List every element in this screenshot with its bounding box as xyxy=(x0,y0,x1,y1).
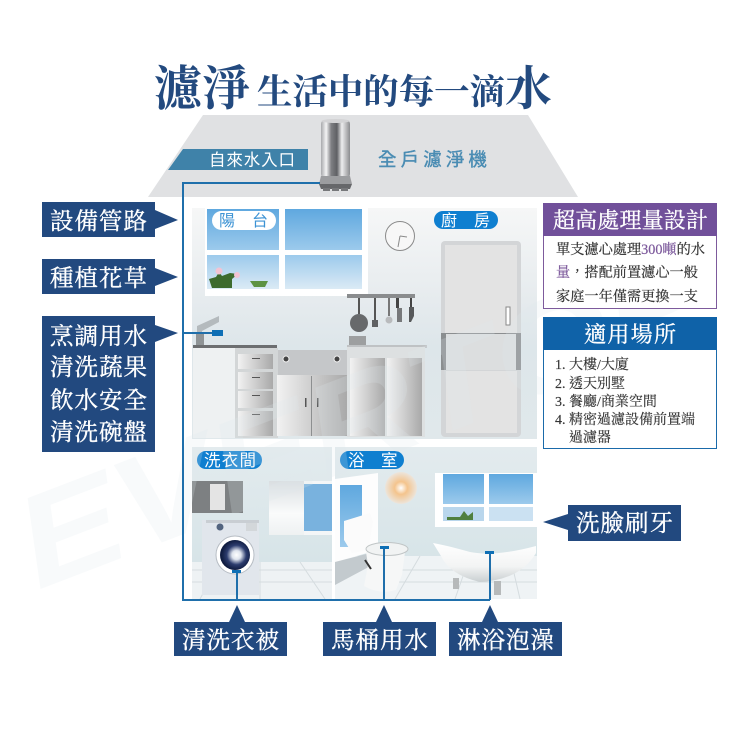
counter xyxy=(193,345,277,348)
pipe outlets xyxy=(212,330,494,573)
bathroom pill xyxy=(340,451,404,470)
panel: high capacity: 量，搭配前置濾心一般 xyxy=(556,264,698,281)
roof xyxy=(148,115,578,197)
title: 生活中的每一滴 xyxy=(257,73,505,112)
panel: suitable places: 3. 餐廳/商業空間 xyxy=(555,393,657,410)
panel: suitable places: 1. 大樓/大廈 xyxy=(555,356,629,373)
label: face washing: 洗臉刷牙 xyxy=(576,510,673,537)
label: kitchen uses xyxy=(42,316,178,452)
label: laundry: 清洗衣被 xyxy=(182,627,279,654)
panel: bathroom xyxy=(335,447,537,599)
ceiling lamp xyxy=(385,472,417,504)
label: equipment piping: 設備管路 xyxy=(50,208,147,235)
label: planting xyxy=(42,259,178,294)
panel: high capacity: 超高處理量設計 xyxy=(553,208,708,233)
kitchen pill: 房 xyxy=(474,212,490,230)
panel: kitchen xyxy=(192,208,537,439)
stove xyxy=(277,350,347,436)
label: bathing: 淋浴泡澡 xyxy=(457,627,554,654)
label: kitchen uses: 飲水安全 xyxy=(50,387,147,414)
panel: suitable places xyxy=(543,317,717,448)
watermark: EVERTOP xyxy=(0,218,730,616)
kitchen pill xyxy=(434,211,498,230)
panel: suitable places: 4. 精密過濾設備前置端 xyxy=(555,411,695,428)
title xyxy=(154,63,552,116)
balcony pill: 台 xyxy=(252,212,268,230)
label: kitchen uses: 清洗蔬果 xyxy=(50,354,147,381)
label: toilet: 馬桶用水 xyxy=(331,627,428,654)
title: 水 xyxy=(505,64,552,116)
kitchen pill: 廚 xyxy=(441,211,457,230)
panel: suitable places: 適用場所 xyxy=(584,322,676,347)
label: bathing xyxy=(449,605,562,656)
panel: suitable places: 過濾器 xyxy=(569,429,611,446)
banner: tap water inlet xyxy=(168,149,308,170)
window: balcony xyxy=(205,208,368,296)
filter machine xyxy=(319,119,352,191)
banner: tap water inlet: 自來水入口 xyxy=(209,150,295,170)
curtain window xyxy=(269,481,332,535)
balcony pill: 陽 xyxy=(219,212,235,230)
label: face washing xyxy=(543,505,681,541)
label: kitchen uses: 清洗碗盤 xyxy=(50,419,147,446)
door xyxy=(335,473,378,585)
title: 濾淨 xyxy=(154,63,250,116)
panel: high capacity xyxy=(543,203,717,308)
utensil rack xyxy=(347,294,415,345)
bathroom pill: 浴 xyxy=(348,451,365,470)
label: kitchen uses: 烹調用水 xyxy=(50,323,147,350)
cabinet xyxy=(347,347,425,437)
label: planting: 種植花草 xyxy=(50,265,147,292)
bathroom pill: 室 xyxy=(381,451,398,470)
icon: wall clock xyxy=(386,222,414,250)
faucet xyxy=(196,316,219,345)
panel: suitable places: 2. 透天別墅 xyxy=(555,376,625,392)
panel: high capacity: 家庭一年僅需更換一支 xyxy=(556,288,698,305)
laundry pill: 洗衣間 xyxy=(204,451,256,470)
balcony pill xyxy=(212,211,276,230)
panel: laundry room xyxy=(192,447,332,599)
panel: high capacity: 單支濾心處理300噸的水 xyxy=(556,241,705,258)
washing machine xyxy=(202,520,259,595)
machine label: 全戶濾淨機 xyxy=(378,149,487,170)
label: laundry xyxy=(174,605,287,656)
water pipes xyxy=(183,183,490,600)
shelf xyxy=(192,481,243,513)
bathtub xyxy=(433,543,536,595)
label: equipment piping xyxy=(42,202,178,237)
refrigerator xyxy=(441,241,521,437)
bathroom window xyxy=(435,473,537,527)
toilet xyxy=(344,513,408,592)
label: toilet xyxy=(323,605,436,656)
drawers xyxy=(235,348,278,438)
